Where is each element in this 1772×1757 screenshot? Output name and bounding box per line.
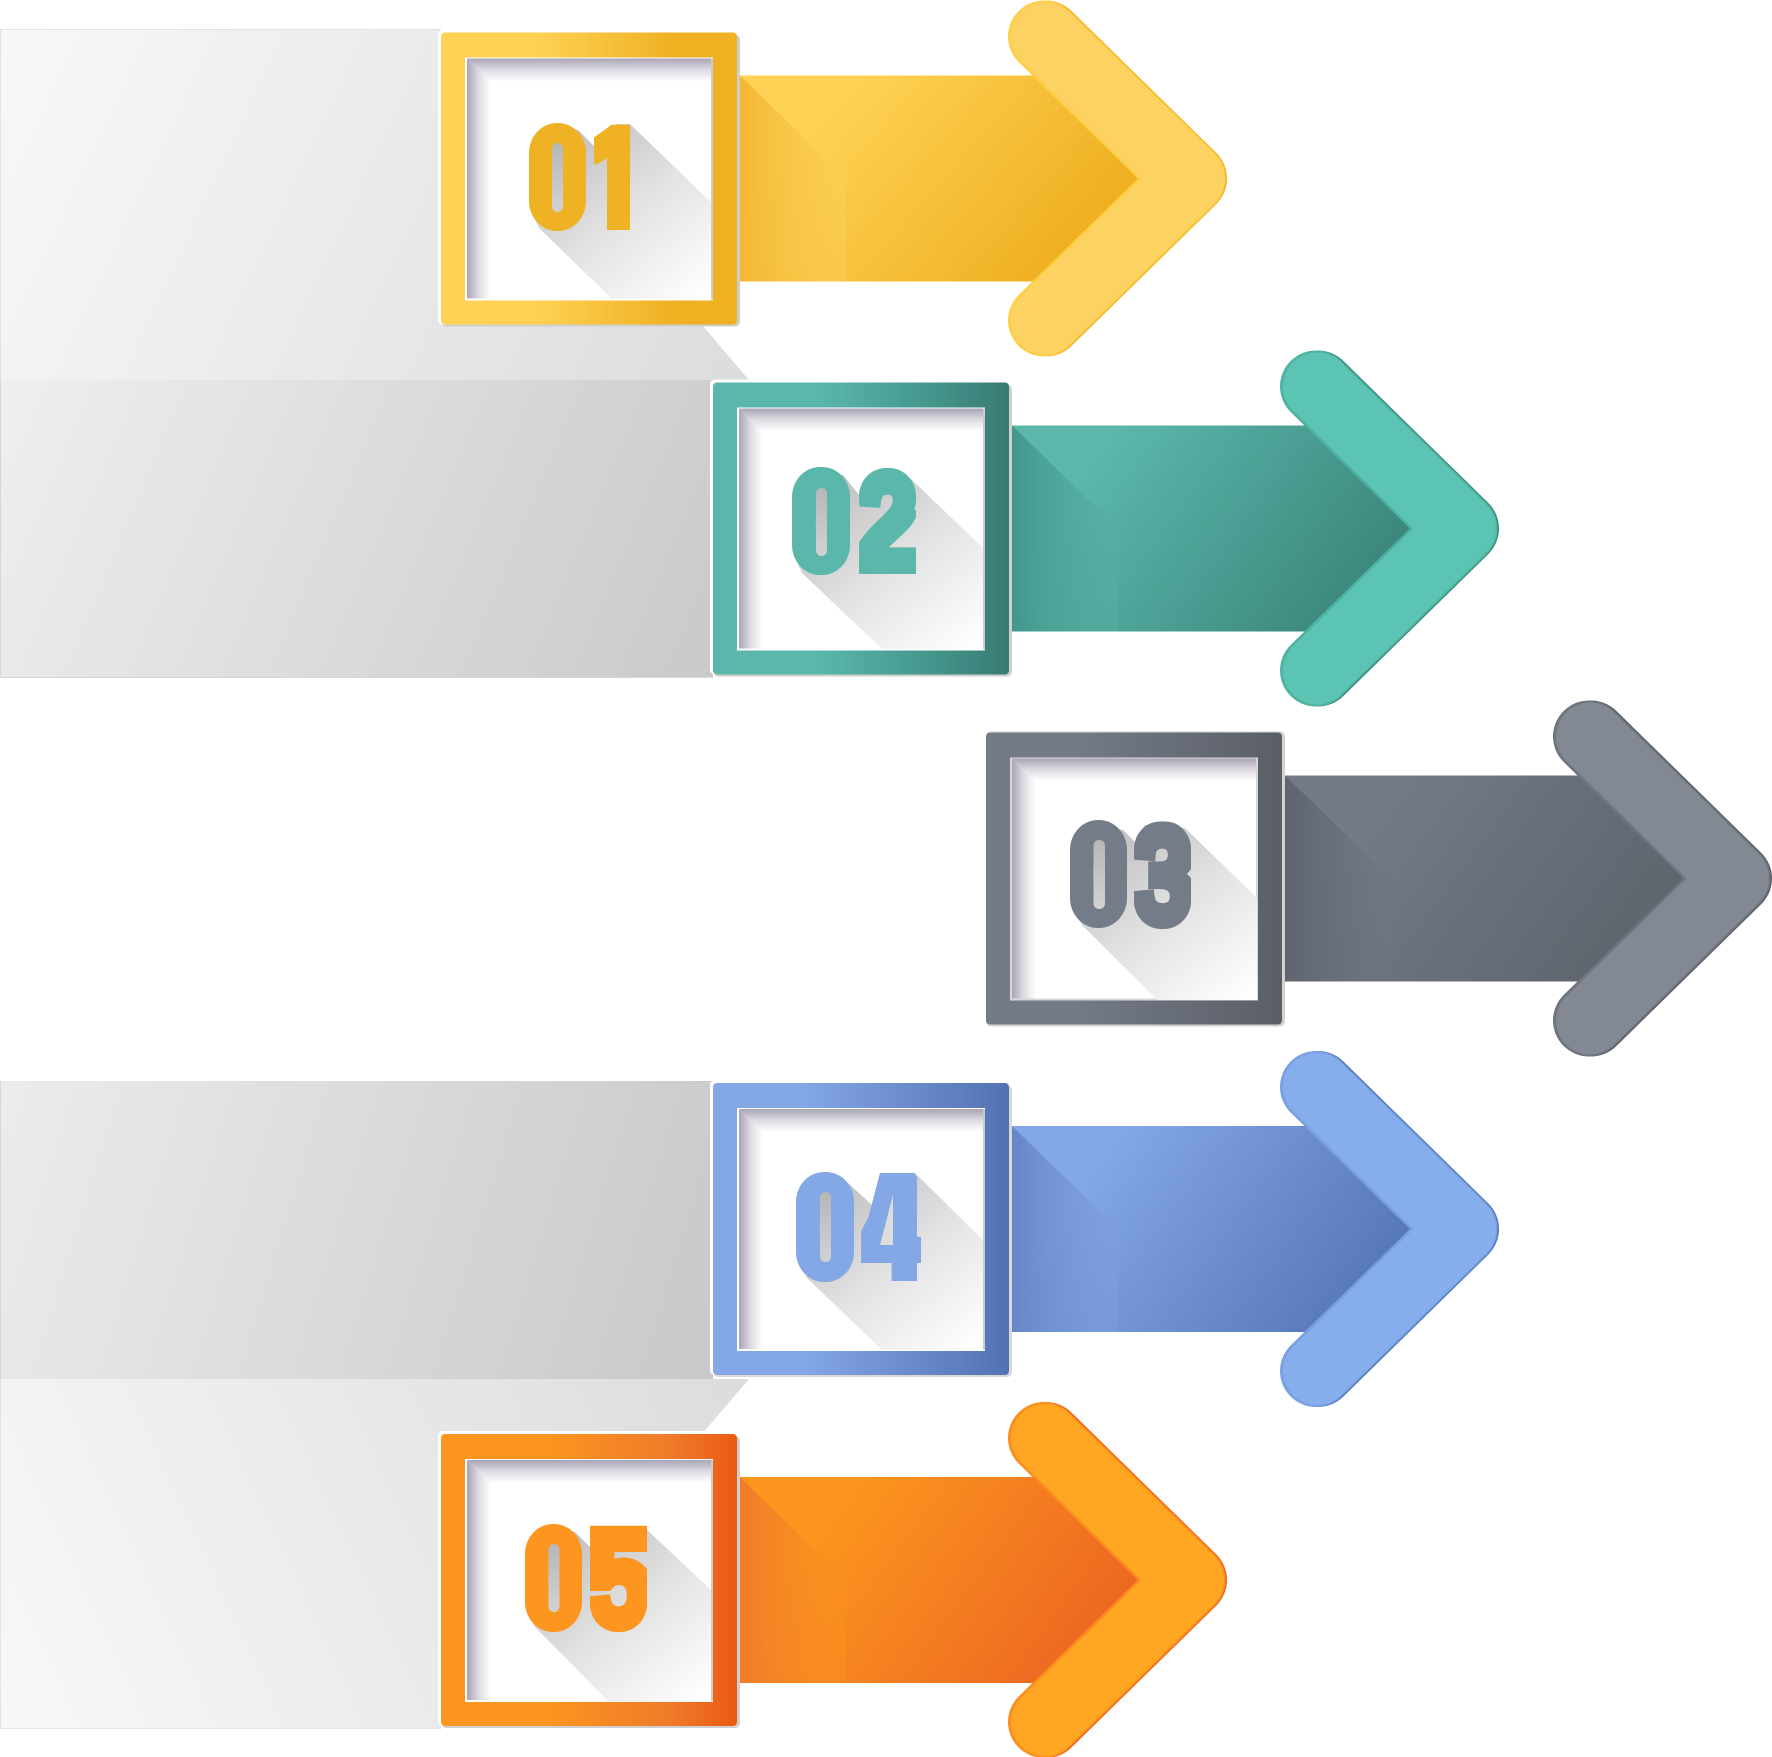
number 02: [792, 467, 916, 575]
step 02: [710, 380, 1463, 676]
arrow shaft 03: [1285, 776, 1683, 982]
arrow shaft 05: [740, 1477, 1138, 1683]
arrow chevron 03: [1589, 736, 1736, 1020]
number frame 04: [710, 1080, 1012, 1377]
step 04: [710, 1080, 1463, 1377]
long shadow 01: [533, 124, 711, 299]
number 02: 0: [786, 440, 856, 603]
number frame 05: [438, 1431, 740, 1728]
number 03: 0: [1064, 793, 1133, 956]
arrow chevron 04: [1316, 1087, 1463, 1371]
long shadow 05: [529, 1526, 711, 1701]
number 01: [529, 123, 630, 231]
number 05: 5: [586, 1504, 652, 1656]
arrow shaft 01: [740, 76, 1138, 282]
number 03: 3: [1130, 801, 1196, 953]
long shadow 02: [796, 472, 983, 649]
arrow shaft 04: [1012, 1126, 1410, 1332]
number 05: [525, 1524, 647, 1632]
number frame 03: [986, 732, 1285, 1026]
panel: grey backing 04: [0, 1081, 713, 1379]
number frame 01: [438, 30, 740, 326]
arrow chevron 02: [1316, 386, 1463, 670]
number 03: [1070, 820, 1191, 929]
number 02: 2: [854, 447, 921, 599]
number 04: 4: [859, 1153, 923, 1305]
arrow chevron 01: [1044, 36, 1191, 320]
long shadow 04: [800, 1173, 983, 1350]
number 04: 0: [790, 1144, 860, 1309]
long shadow 03: [1074, 825, 1257, 1000]
number frame 02: [710, 380, 1012, 676]
step 01: [438, 30, 1191, 326]
arrow shaft 02: [1012, 426, 1410, 632]
arrow chevron 05: [1044, 1438, 1191, 1722]
panel: grey backing 02: [0, 380, 713, 678]
number 01: 0: [523, 96, 592, 259]
number 05: 0: [519, 1497, 588, 1660]
number 01: 1: [583, 101, 653, 254]
step 05: [438, 1431, 1191, 1728]
step 03: [986, 732, 1736, 1026]
panel: grey backing 01: [0, 29, 749, 380]
number 04: [796, 1172, 921, 1282]
panel: grey backing 05: [0, 1379, 749, 1729]
